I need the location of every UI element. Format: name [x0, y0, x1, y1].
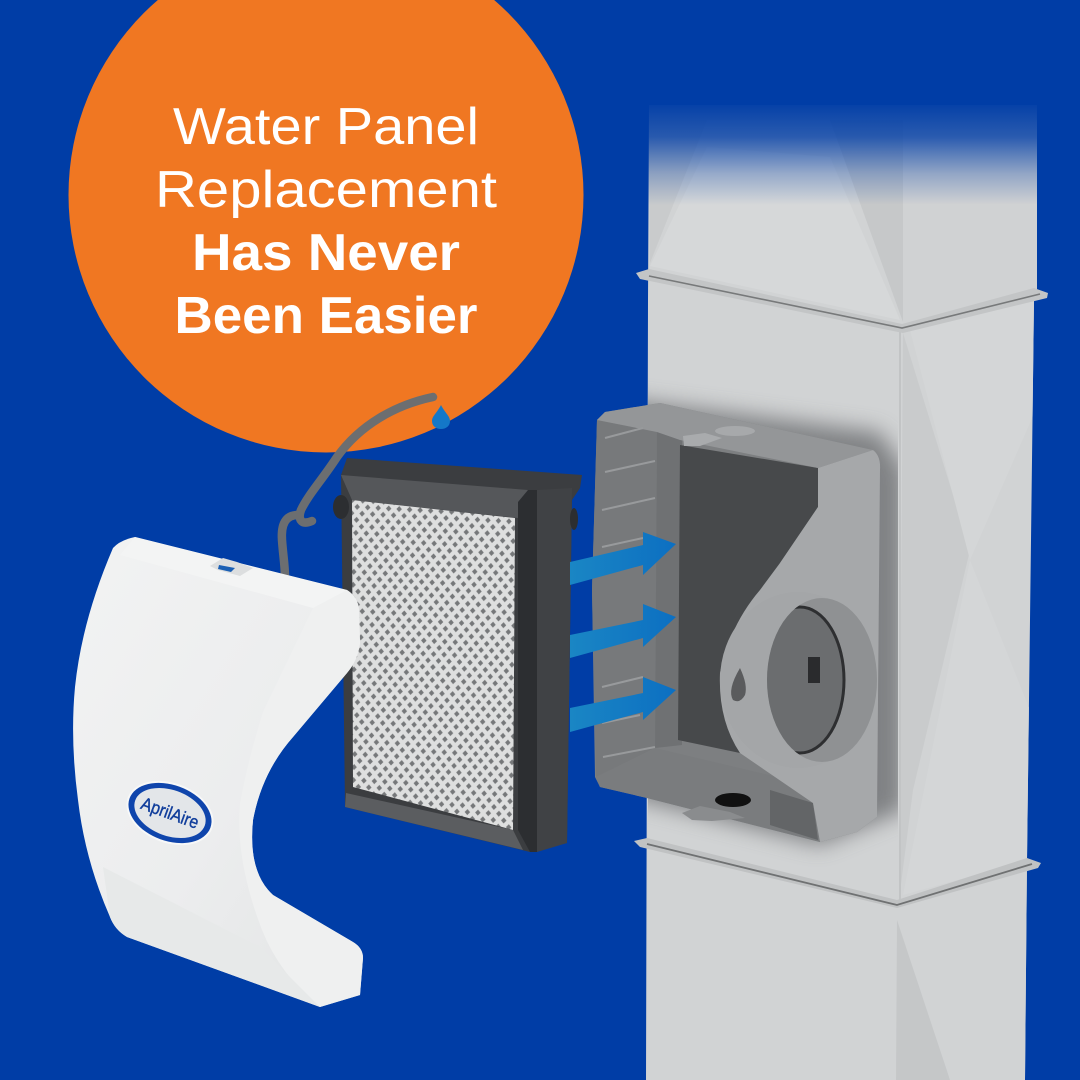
cover bottom facet: [103, 867, 320, 1007]
base floor dark corner: [770, 790, 818, 840]
base top face: [597, 403, 873, 468]
base outer shell: [592, 403, 880, 842]
water panel: [333, 458, 582, 852]
base left wall: [592, 420, 657, 777]
collar opening: [767, 598, 877, 762]
arrow 2: [570, 604, 676, 658]
collar back plate: [756, 607, 844, 753]
base inner band: [655, 432, 682, 748]
heading: Has Never: [192, 224, 460, 282]
panel bottom lip: [345, 793, 523, 850]
base latch: [683, 433, 722, 446]
panel left knob: [333, 495, 349, 519]
top latch: [210, 558, 253, 576]
base back wall: [678, 445, 818, 753]
base ribs: [602, 428, 655, 757]
panel front column: [518, 490, 537, 852]
cover top facet: [120, 537, 347, 608]
bottom flange: [634, 838, 1041, 908]
panel right knob: [570, 508, 578, 530]
AprilAire logo: [117, 769, 223, 857]
heading: Replacement: [155, 161, 498, 219]
top flange: [636, 269, 1048, 333]
heading: [155, 98, 498, 345]
panel body: [341, 458, 582, 852]
base floor hole: [715, 793, 751, 807]
panel side: [537, 488, 572, 852]
base front S panel: [720, 450, 880, 842]
cover: [73, 537, 363, 1007]
humidifier base: [592, 403, 880, 842]
cover right facet: [239, 590, 363, 1007]
panel mesh: [345, 495, 520, 835]
arrows: [570, 532, 676, 732]
panel top band: [341, 475, 528, 518]
base tab: [682, 806, 745, 821]
heading: Water Panel: [173, 98, 479, 156]
duct shadow around unit: [648, 388, 898, 856]
collar slot: [808, 657, 820, 683]
duct top fade: [640, 100, 1050, 205]
water hose: [282, 397, 433, 578]
base floor: [596, 748, 820, 842]
heading: Been Easier: [174, 287, 478, 345]
duct: [646, 107, 1037, 1080]
duct collar: [720, 592, 876, 768]
icon: water drop: [432, 405, 450, 429]
AprilAire logo: AprilAire: [138, 793, 202, 833]
arrow 3: [570, 677, 676, 732]
arrow 1: [570, 532, 676, 585]
collar teardrop hole: [731, 668, 746, 701]
orange circle: [68, 0, 584, 452]
